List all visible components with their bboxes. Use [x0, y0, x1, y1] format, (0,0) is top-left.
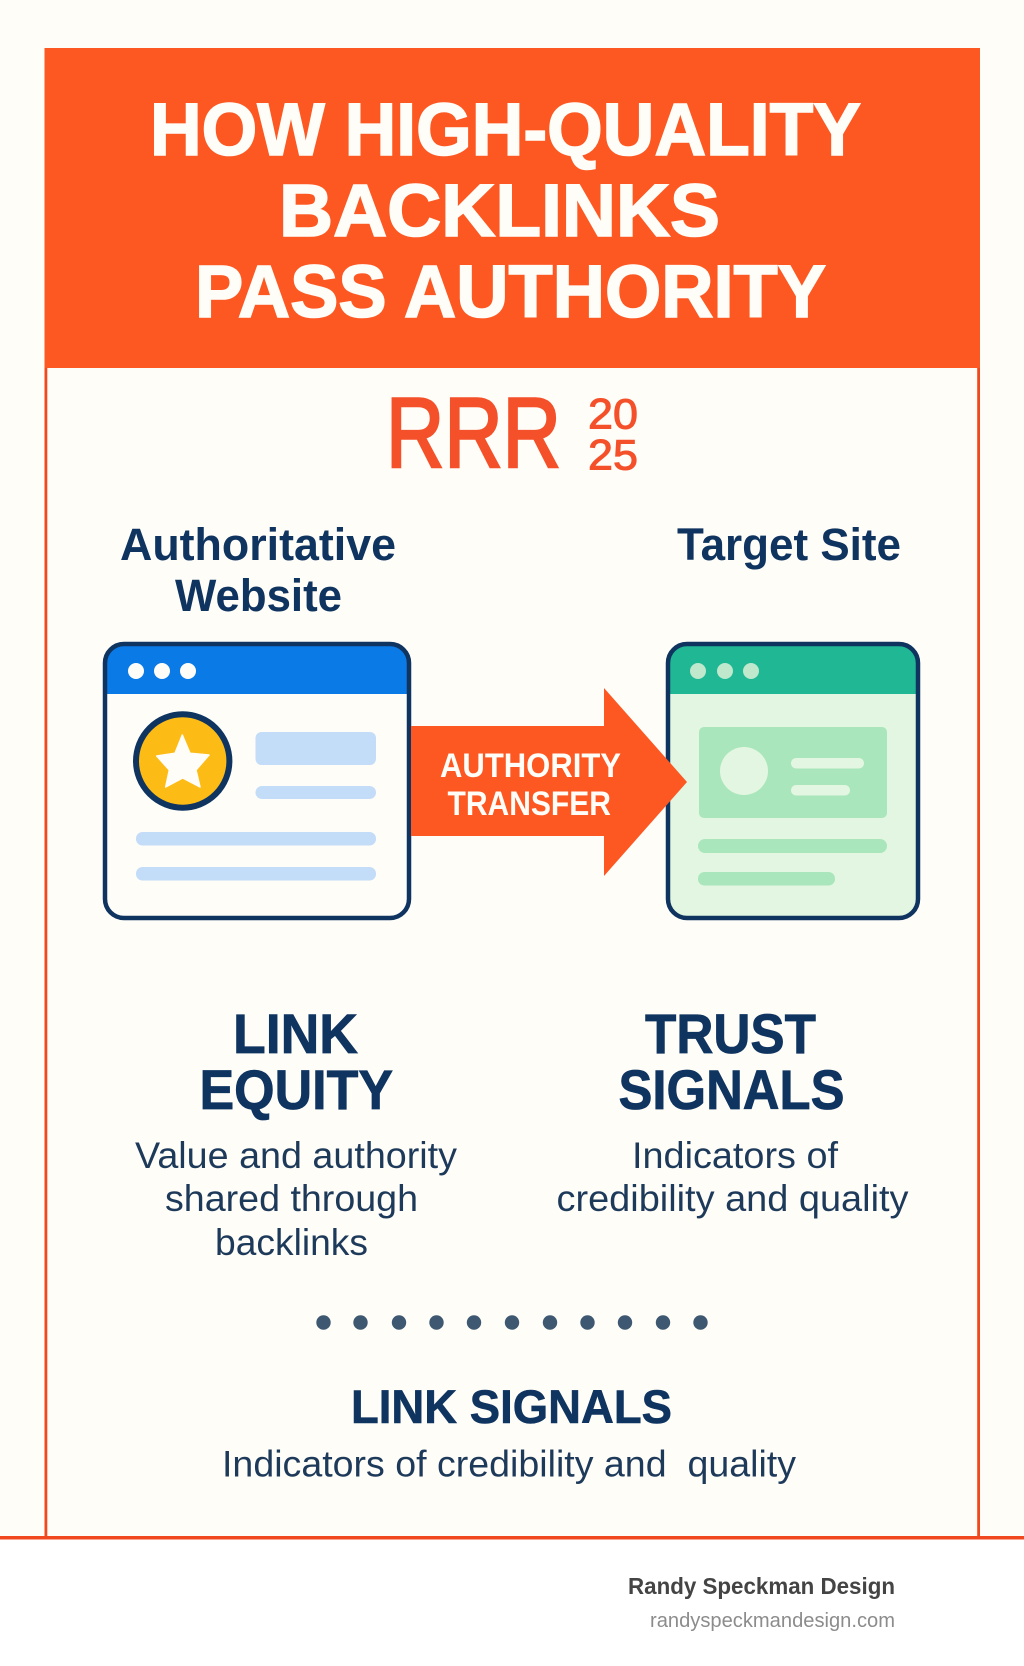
icon: gold star badge: [136, 714, 229, 808]
header banner: [44, 48, 980, 368]
footer credit: Randy Speckman Design: [628, 1573, 895, 1599]
heading: Link Equity: LINK: [233, 1002, 358, 1065]
arrow: authority transfer: AUTHORITY: [440, 747, 621, 785]
heading: Trust Signals: TRUST: [645, 1002, 816, 1065]
text: trust signals description: [556, 1135, 909, 1219]
footer band: [0, 1538, 1024, 1666]
heading: Link Signals: LINK SIGNALS: [351, 1380, 672, 1433]
dotted divider: [316, 1315, 708, 1330]
heading: Trust Signals: [618, 1002, 844, 1121]
heading: Link Equity: [200, 1002, 393, 1121]
logo: RRR 2025: RRR: [386, 377, 561, 488]
text: trust signals description: credibility and quality: [556, 1178, 909, 1219]
text: link signals description: Indicators of credibility and quality: [222, 1444, 796, 1484]
title: PASS AUTHORITY: [195, 250, 826, 333]
text: link equity description: backlinks: [215, 1222, 368, 1263]
panel: content frame: [0, 360, 1024, 1540]
heading: Authoritative Website: Authoritative: [120, 519, 396, 570]
heading: Authoritative Website: Website: [175, 570, 342, 621]
icon: authoritative website browser: [105, 644, 409, 918]
heading: Target Site: Target Site: [677, 519, 901, 570]
footer credit: randyspeckmandesign.com: [650, 1610, 895, 1632]
icon: target site browser: [668, 644, 918, 918]
text: link equity description: [135, 1135, 458, 1263]
arrow: authority transfer: [411, 688, 687, 876]
title: BACKLINKS: [279, 169, 720, 252]
text: trust signals description: Indicators of: [632, 1135, 839, 1176]
title: HOW HIGH-QUALITY: [150, 88, 861, 171]
logo: RRR 2025: 20: [588, 390, 638, 438]
heading: Trust Signals: SIGNALS: [618, 1058, 844, 1121]
footer credit: [628, 1573, 895, 1632]
text: link equity description: Value and authority: [135, 1135, 458, 1176]
text: link equity description: shared through: [165, 1178, 418, 1219]
logo: RRR 2025: 25: [588, 432, 638, 480]
arrow: authority transfer: TRANSFER: [448, 785, 611, 823]
heading: Link Equity: EQUITY: [200, 1058, 393, 1121]
heading: Authoritative Website: [120, 519, 396, 621]
title: [150, 88, 861, 333]
